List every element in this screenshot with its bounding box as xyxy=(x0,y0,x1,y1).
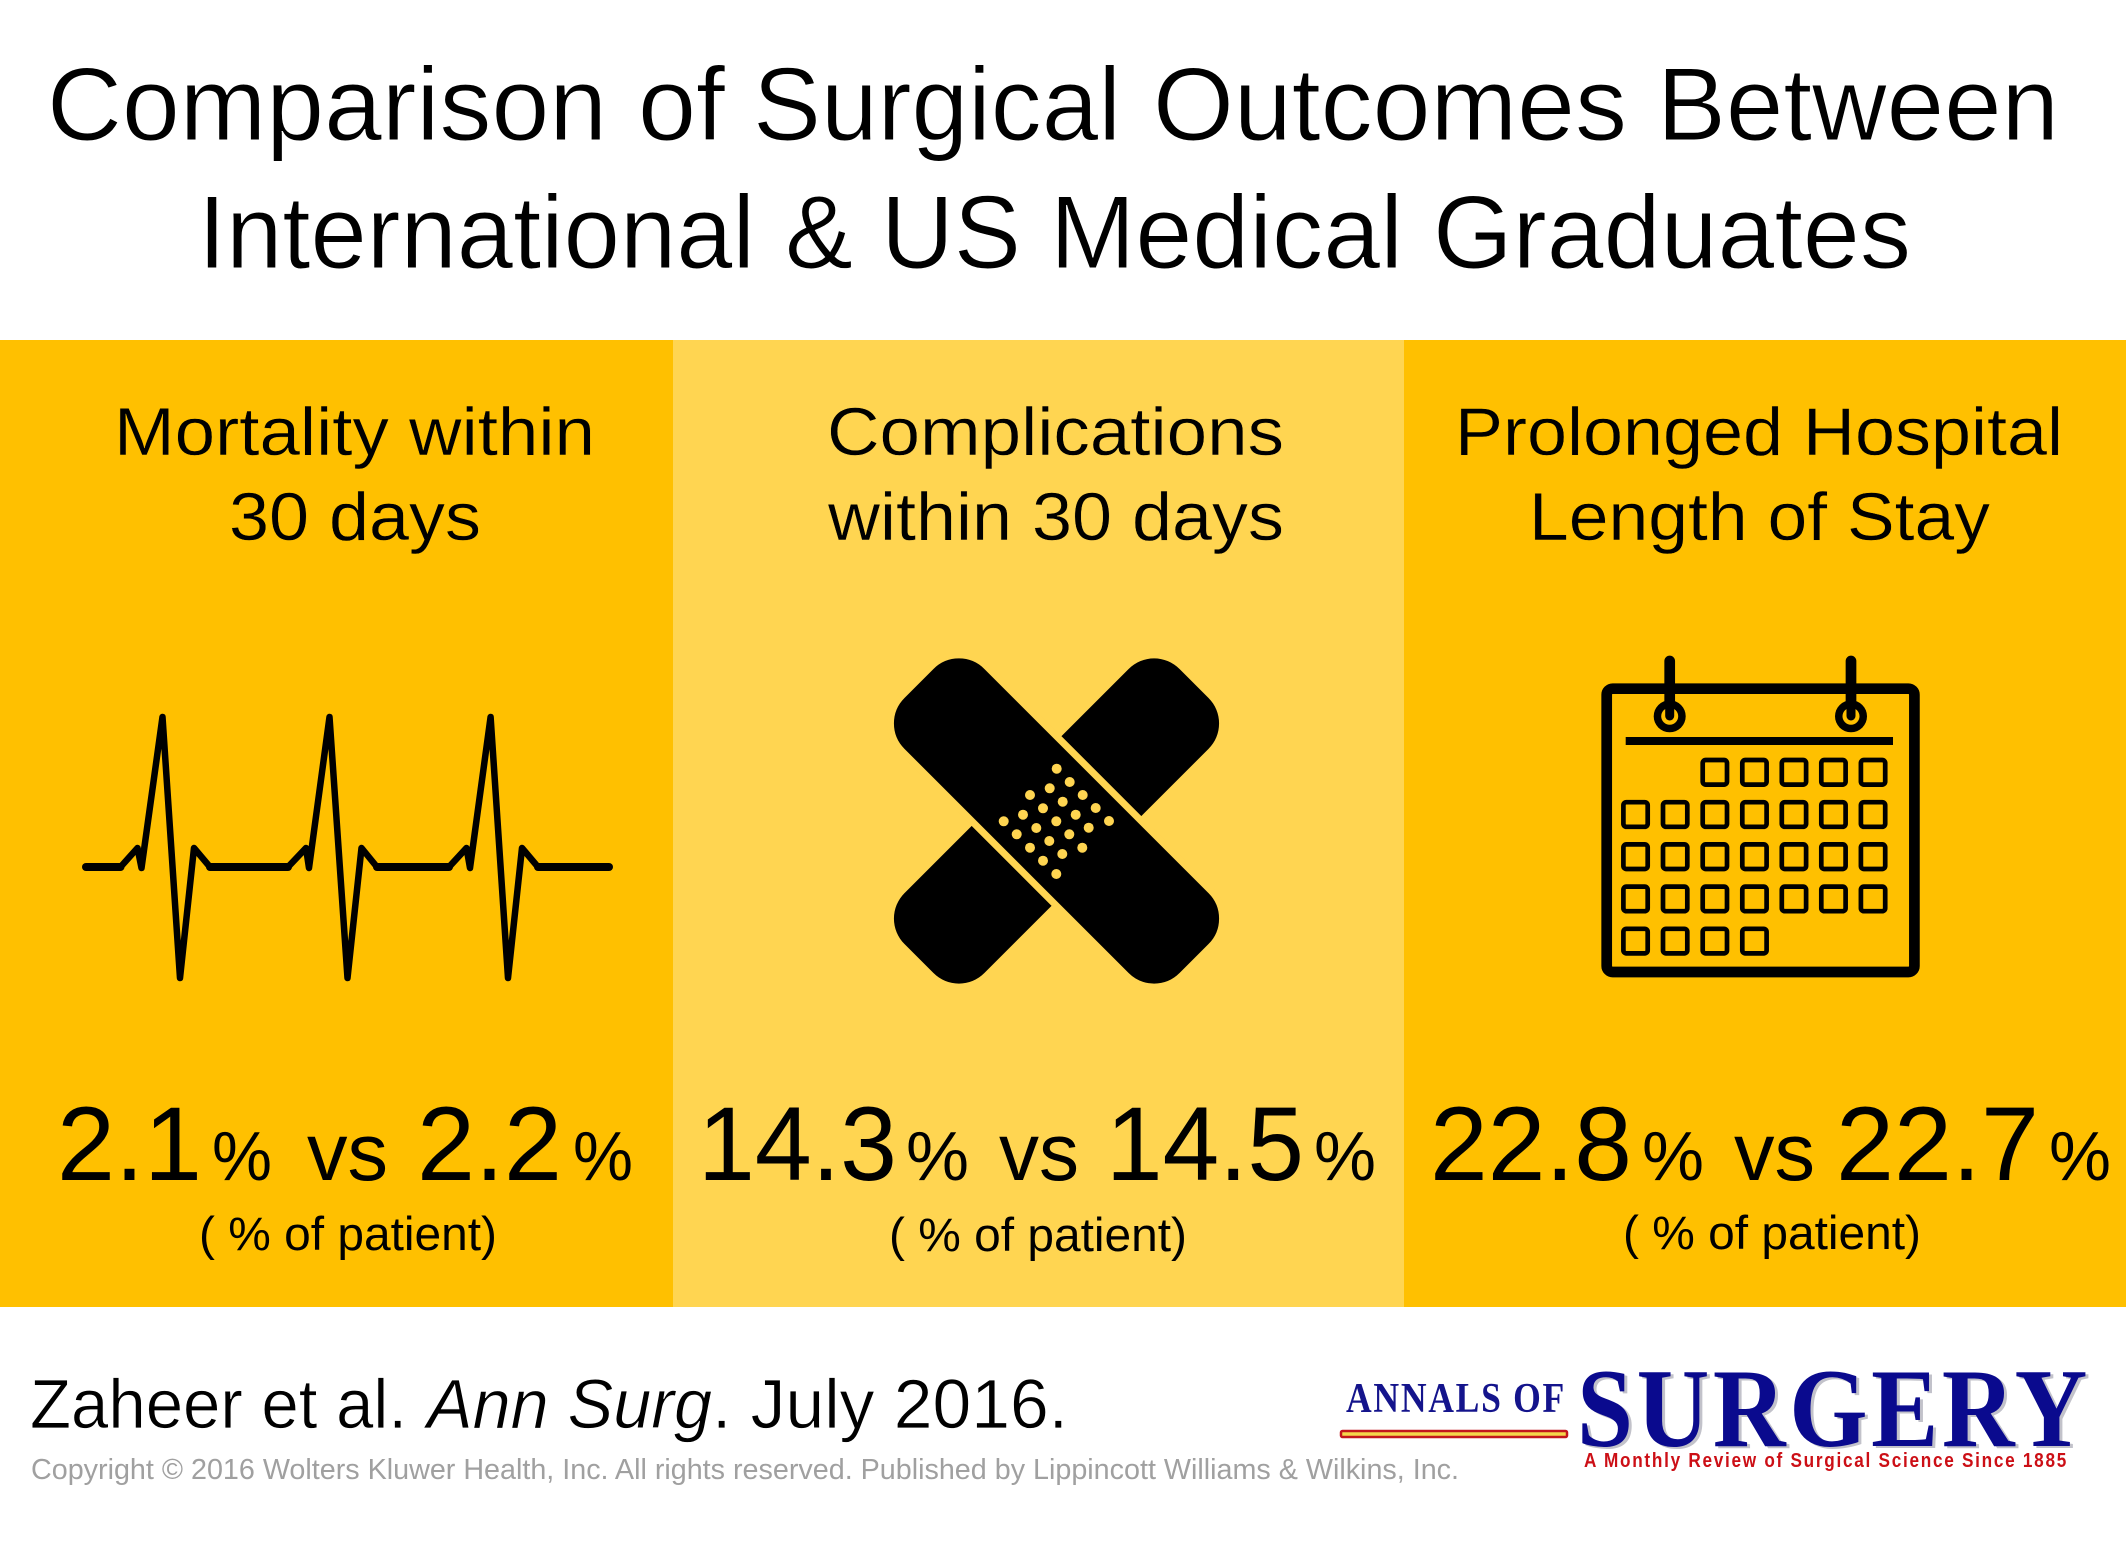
copyright: Copyright © 2016 Wolters Kluwer Health, Inc. All rights reserved. Published by Lippincott Williams & Wilkins, Inc. xyxy=(31,1454,1459,1486)
title: International xyxy=(198,175,755,291)
heading: mortality within 30 days xyxy=(114,394,595,555)
title xyxy=(47,47,2059,291)
title: Comparison xyxy=(47,47,607,163)
statistic: 14.3% vs 14.5%: 14.5 xyxy=(1106,1086,1304,1203)
statistic: 2.1% vs 2.2%: 2.1 xyxy=(57,1086,202,1203)
statistic: 14.3% vs 14.5% xyxy=(698,1086,1376,1203)
title: of xyxy=(638,47,726,163)
panel background: hospital stay xyxy=(1404,340,2126,1307)
title: Between xyxy=(1657,47,2059,163)
icon: crossed bandages xyxy=(874,639,1239,1003)
statistic: 14.3% vs 14.5%: vs xyxy=(999,1107,1079,1198)
title: & xyxy=(785,175,853,291)
heading: complications within 30 days xyxy=(827,394,1284,555)
statistic: 2.1% vs 2.2% xyxy=(57,1086,633,1203)
title: Surgical xyxy=(753,47,1121,163)
icon: calendar xyxy=(1607,661,1914,972)
statistic: 14.3% vs 14.5%: % xyxy=(1314,1117,1376,1195)
panel background: complications xyxy=(673,340,1404,1307)
statistic: 22.8% vs 22.7%: % xyxy=(2049,1117,2111,1195)
icon: heartbeat line xyxy=(86,717,609,978)
heading: prolonged hospital length of stay: Length of Stay xyxy=(1529,479,1990,555)
title: Graduates xyxy=(1433,175,1911,291)
panel: complications xyxy=(673,340,1404,1307)
caption: percent of patient: ( % of patient) xyxy=(199,1207,497,1260)
caption: percent of patient: ( % of patient) xyxy=(1623,1206,1921,1259)
heading: mortality within 30 days: 30 days xyxy=(229,479,481,555)
logo: red and yellow rule xyxy=(1341,1431,1567,1437)
statistic: 22.8% vs 22.7%: % xyxy=(1642,1117,1704,1195)
statistic: 22.8% vs 22.7%: vs xyxy=(1734,1107,1815,1198)
statistic: 22.8% vs 22.7%: 22.8 xyxy=(1430,1086,1632,1203)
panel: hospital stay xyxy=(1404,340,2126,1307)
panel background: mortality xyxy=(0,340,673,1307)
statistic: 22.8% vs 22.7% xyxy=(1430,1086,2111,1203)
statistic: 2.1% vs 2.2%: % xyxy=(573,1117,633,1195)
heading: prolonged hospital length of stay xyxy=(1455,394,2063,555)
title: Outcomes xyxy=(1153,47,1627,163)
statistic: 2.1% vs 2.2%: 2.2 xyxy=(417,1086,562,1203)
citation: . July 2016. xyxy=(712,1365,1068,1443)
heading: prolonged hospital length of stay: Prolonged Hospital xyxy=(1455,394,2063,470)
title: US xyxy=(881,175,1021,291)
statistic: 2.1% vs 2.2%: vs xyxy=(307,1107,388,1198)
logo: Annals of wordmark: ANNALS OF xyxy=(1346,1376,1566,1422)
statistic: 14.3% vs 14.5%: % xyxy=(906,1117,969,1195)
citation xyxy=(30,1365,1068,1443)
statistic: 2.1% vs 2.2%: % xyxy=(212,1117,272,1195)
citation: Zaheer et al. xyxy=(30,1365,407,1443)
heading: complications within 30 days: Complications xyxy=(827,394,1284,470)
statistic: 14.3% vs 14.5%: 14.3 xyxy=(698,1086,897,1203)
statistic: 22.8% vs 22.7%: 22.7 xyxy=(1836,1086,2039,1203)
caption: percent of patient: ( % of patient) xyxy=(889,1208,1187,1261)
citation: Ann Surg xyxy=(423,1365,712,1443)
heading: mortality within 30 days: Mortality within xyxy=(114,394,595,470)
logo: Annals of Surgery xyxy=(1341,1347,2094,1473)
title: Medical xyxy=(1050,175,1403,291)
panel: mortality xyxy=(0,340,673,1307)
heading: complications within 30 days: within 30 days xyxy=(827,479,1284,555)
